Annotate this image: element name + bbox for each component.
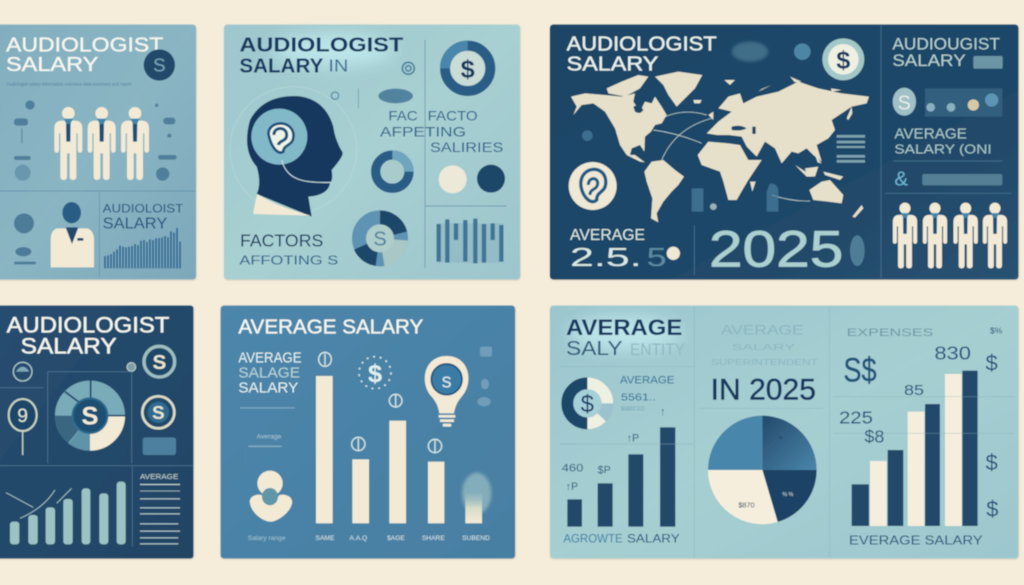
panel 3 background <box>550 25 1018 279</box>
panel 4 background <box>0 306 193 558</box>
heading: average value: 2.5. <box>570 242 642 272</box>
icon: blurred ear piece <box>378 89 413 103</box>
heading: audiologist salary: AUDIOLOGIST <box>6 34 164 57</box>
panel: world map with 2025 salary <box>550 25 1018 279</box>
chart: small dollar donut <box>567 383 607 423</box>
heading: factors affecting: FACTORS <box>240 231 323 251</box>
caption: agrowte salary: SALARY <box>627 533 680 546</box>
heading: average salary: SALARY (ONI <box>894 141 992 156</box>
caption: agrowte salary: AGROWTE <box>563 533 623 546</box>
heading: average salary: AVERAGE <box>566 315 682 340</box>
panel 2 background <box>224 25 520 279</box>
icon: blurred badge <box>850 235 865 266</box>
heading: audiologist salary: SALARY <box>567 54 658 76</box>
chart: pie: % <box>778 435 782 440</box>
icon: navy circle <box>477 165 505 193</box>
chart: segmented donut <box>63 380 125 442</box>
ampersand with caption <box>894 168 1002 191</box>
heading: audiologist salary small: SALARY <box>103 215 168 232</box>
heading: audiologist salary: AUDIOLOGIST <box>567 34 717 56</box>
heading: audiologist salary <box>7 313 169 358</box>
chart: small dollar donut: $ <box>581 391 594 418</box>
heading: average salary: SALY <box>566 338 623 360</box>
chart: barcode bars <box>437 219 503 263</box>
icon: dashed dollar ring: $ <box>368 360 382 388</box>
heading: average salary: ENTITY <box>630 340 685 359</box>
tag <box>973 56 1003 69</box>
icon: head with ear <box>230 87 357 217</box>
icon: dollar signs: $ <box>986 351 998 376</box>
bottom-left decorative icons <box>14 213 36 264</box>
label: expenses: $% <box>990 325 1003 335</box>
heading: audiologist salary: SALARY <box>6 53 99 76</box>
chart axis labels <box>248 535 490 542</box>
icon: dark dollar badge: S <box>153 55 166 76</box>
map route lines <box>653 112 810 201</box>
divider lines <box>694 25 1012 279</box>
legend: average list <box>140 472 180 544</box>
caption: agrowte salary <box>563 533 680 546</box>
icon: person in white coat <box>51 202 94 267</box>
heading: average value: AVERAGE <box>570 227 645 244</box>
heading: average value <box>570 227 680 272</box>
icon: dollar coin ring: $ <box>461 55 475 83</box>
caption line: Audiologist salary information overview data summary and report <box>7 81 132 86</box>
subheading stack: SALAGE <box>238 365 300 381</box>
title glow <box>568 317 682 350</box>
heading: average salary: AVERAGE SALARY <box>238 316 423 338</box>
icon: dashed dollar ring <box>359 357 391 389</box>
icon: cream circle <box>439 165 467 193</box>
heading: audiologist salary small <box>103 203 183 232</box>
icon: map pin blurred <box>582 130 778 212</box>
heading: 2025: 2025 <box>709 221 843 278</box>
chart: faded last bar <box>462 473 491 523</box>
bar labels: $P <box>598 464 611 476</box>
chart: small donut <box>376 155 409 188</box>
chart axis labels: $AGE <box>387 535 405 542</box>
chart axis labels: A.A.Q <box>349 535 367 542</box>
bar labels: ↑P <box>566 481 578 493</box>
trend lines <box>6 488 72 518</box>
icon: dollar ring: S <box>152 351 166 374</box>
icon: dollar coin <box>822 38 864 80</box>
small caption lines: Average <box>257 433 282 440</box>
value labels: $8 <box>864 427 884 447</box>
heading: factors affecting salaries: FACTO <box>428 108 478 124</box>
heading: average salary <box>894 126 992 156</box>
label: expenses: EXPENSES <box>847 327 933 339</box>
subheading stack: SALARY <box>238 381 299 397</box>
heading: audiologist salary side <box>892 34 1000 70</box>
subheading stack: AVERAGE <box>238 351 302 367</box>
icon: dollar coin: $ <box>836 47 850 75</box>
heading: audiologist salary small: AUDIOLOIST <box>103 203 183 216</box>
small faded icons <box>477 347 492 406</box>
value labels: 85 <box>904 383 924 399</box>
three audiologist figures <box>54 107 149 180</box>
icon: dollar ring lower <box>142 396 174 428</box>
heading: average salary <box>566 315 685 360</box>
icon: person silhouette <box>250 471 292 522</box>
chart: segmented dollar donut <box>359 218 401 259</box>
icon: dollar signs <box>986 351 998 522</box>
small caption lines <box>240 407 295 447</box>
bar labels <box>562 406 665 493</box>
icon: dark dollar badge <box>144 49 175 81</box>
value labels: S$ <box>843 352 877 390</box>
icon: ear in cream circle <box>569 162 617 210</box>
icon: pin ring <box>9 399 37 455</box>
chart: pie: $870 <box>738 500 755 509</box>
panel 6 background <box>550 306 1018 558</box>
heading: audiologist salary in <box>239 34 404 77</box>
panel: audiologist salary donut and trend <box>0 306 193 558</box>
heading: audiologist salary <box>567 34 717 76</box>
panel: audiologist salary, staff <box>0 25 196 279</box>
heading: audiologist salary side: AUDIOUGIST <box>892 34 1000 53</box>
icon: dollar signs: $ <box>986 450 998 475</box>
value labels: 225 <box>839 407 873 427</box>
chart: growth bars <box>567 427 675 527</box>
chart axis labels: SUBEND <box>462 535 490 542</box>
caption: everage salary: EVERAGE SALARY <box>849 532 983 547</box>
divider lines <box>0 191 195 277</box>
value labels: 830 <box>934 342 971 363</box>
chart: rising bars <box>105 228 180 268</box>
chart: cream salary bars <box>316 376 444 523</box>
heading: audiologist salary in: IN <box>328 56 348 76</box>
heading: factors affecting: AFFOTING S <box>239 252 338 267</box>
title glow <box>273 33 393 67</box>
heading: average salary: AVERAGE <box>894 126 967 142</box>
chart: pie <box>708 416 817 524</box>
heading: factors affecting <box>239 231 338 267</box>
chart axis labels: SHARE <box>422 535 445 542</box>
small decorative icons <box>14 100 177 181</box>
legend: average list: AVERAGE <box>140 472 178 481</box>
subheading stack <box>238 351 302 397</box>
icon: small dome <box>13 362 32 381</box>
chart: world map <box>571 72 869 222</box>
chart: rising bars <box>10 482 126 544</box>
panel: average salary bar chart <box>221 306 515 558</box>
bar labels: ↑P <box>627 433 639 445</box>
heading: factors affecting salaries <box>380 108 503 155</box>
heading: in 2025: IN 2025 <box>711 373 816 406</box>
icon: bar markers <box>319 352 442 453</box>
heading: factors affecting salaries: SALIRIES <box>430 139 503 155</box>
icon: light bulb: s <box>442 370 452 392</box>
four audiologist figures <box>893 203 1007 268</box>
icon: dollar ring lower: S <box>152 402 165 423</box>
label: average value <box>620 374 674 413</box>
heading: audiologist salary in: AUDIOLOGIST <box>239 34 404 57</box>
icon: spiral <box>402 62 414 74</box>
ampersand with caption: & <box>894 168 908 191</box>
chart axis labels: Salary range <box>248 535 286 542</box>
icon: dollar balloon: S <box>898 92 911 114</box>
panel 5 background <box>221 306 515 558</box>
heading: factors affecting salaries: AFPETING <box>380 124 466 140</box>
panel: factors affecting salaries <box>224 25 520 279</box>
heading: audiologist salary <box>6 34 164 76</box>
faded heading: SUPERINTENDENT <box>711 357 819 367</box>
chart: segmented dollar donut: S <box>373 229 387 251</box>
icon: dollar ring <box>144 346 175 377</box>
heading: audiologist salary side: SALARY <box>892 51 966 70</box>
icon: small node <box>127 363 136 371</box>
chart: segmented donut: S <box>82 403 98 431</box>
faded heading <box>711 321 819 367</box>
label: expenses <box>847 325 1003 339</box>
icon strip <box>925 88 1002 117</box>
label: average value: 5561.. <box>621 393 656 404</box>
heading: factors affecting salaries: FAC <box>388 108 418 124</box>
icon: pin ring: 9 <box>17 406 28 427</box>
label: average value: AVERAGE <box>620 374 674 386</box>
icon: dollar balloon <box>893 88 916 116</box>
heading: audiologist salary in: SALARY <box>239 54 324 77</box>
panel: average salary in 2025 <box>550 306 1018 558</box>
divider lines <box>358 40 507 268</box>
bar labels: 460 <box>562 463 583 475</box>
divider lines <box>560 307 1015 557</box>
value labels <box>839 342 971 447</box>
panel 1 background <box>0 25 196 279</box>
faded heading: AVERAGE <box>721 321 804 337</box>
divider lines <box>0 372 193 547</box>
label: average value: $5882 ED <box>621 407 645 413</box>
icon: map legend table <box>837 135 865 163</box>
chart axis labels: SAME <box>316 535 335 542</box>
faded heading: SALARY <box>732 342 795 352</box>
small blurred icons <box>732 42 811 62</box>
bar labels: ↑ <box>660 406 665 418</box>
heading: audiologist salary: SALARY <box>21 333 117 358</box>
icon: dollar coin ring <box>445 46 490 91</box>
heading: audiologist salary: AUDIOLOGIST <box>7 313 169 338</box>
icon: dollar signs: $ <box>986 497 998 522</box>
chart: pie: % % <box>782 492 794 498</box>
tag <box>143 437 176 455</box>
icon: light bulb <box>425 356 468 427</box>
chart: navy and cream bars <box>852 371 978 526</box>
heading: average value: 5 <box>647 242 667 272</box>
